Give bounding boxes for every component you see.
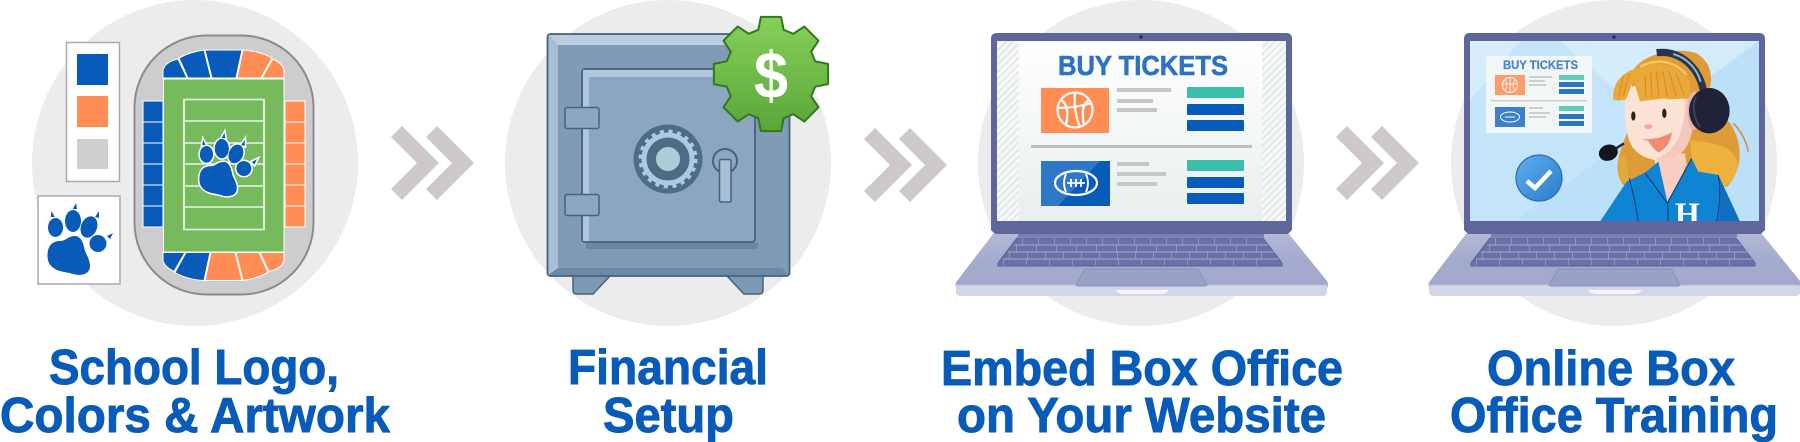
neck bbox=[1653, 153, 1687, 203]
headset band bbox=[1657, 52, 1703, 90]
safe door bbox=[586, 243, 758, 249]
eyes bbox=[1631, 111, 1635, 121]
laptop screen with ticket page bbox=[997, 41, 1286, 221]
panel: school logo, colors and artwork bbox=[32, 0, 358, 326]
mini ticket page: BUY TICKETS bbox=[1503, 58, 1578, 72]
text lines row two bbox=[1117, 162, 1166, 186]
face bbox=[1625, 82, 1693, 160]
football field bbox=[164, 79, 284, 252]
label: embed box office on your website: on Your Website bbox=[957, 389, 1326, 442]
label: school logo colors and artwork: School Logo, bbox=[49, 341, 339, 395]
logo card with paw bbox=[38, 196, 120, 284]
background circle 2 bbox=[505, 0, 831, 326]
buttons row one bbox=[1187, 87, 1244, 131]
label: financial setup: Setup bbox=[603, 389, 734, 442]
ear cushion and cup bbox=[1688, 91, 1697, 130]
green gear with dollar sign: $ bbox=[754, 38, 788, 112]
door hinges bbox=[565, 108, 599, 216]
panel: embed box office on website bbox=[956, 0, 1328, 326]
safe illustration bbox=[548, 34, 790, 294]
nose bbox=[1644, 124, 1652, 129]
jacket bbox=[1600, 158, 1740, 222]
safe feet bbox=[573, 276, 763, 294]
background circle 3 bbox=[978, 0, 1304, 326]
text lines row one bbox=[1117, 88, 1171, 112]
panel: online box office training bbox=[1428, 0, 1800, 326]
stadium illustration bbox=[134, 36, 314, 294]
label: online box office training: Online Box bbox=[1487, 342, 1735, 396]
right stands bbox=[285, 101, 305, 227]
arrow 3 bbox=[1336, 126, 1419, 200]
color swatch card bbox=[66, 42, 120, 182]
laptop frame bbox=[1428, 33, 1800, 296]
football event row bbox=[1041, 161, 1110, 206]
top stands bbox=[163, 50, 284, 78]
back hair bbox=[1618, 51, 1740, 187]
mini ticket page bbox=[1486, 56, 1592, 133]
microphone bbox=[1616, 142, 1625, 149]
laptop screen with trainer bbox=[1470, 41, 1759, 231]
heading: buy tickets: BUY TICKETS bbox=[1058, 50, 1228, 81]
arrow 1 bbox=[391, 126, 474, 200]
fringe hair bbox=[1613, 64, 1690, 101]
mouth bbox=[1642, 132, 1672, 153]
panel: financial setup bbox=[505, 0, 831, 326]
field paw logo bbox=[199, 133, 257, 196]
laptop frame bbox=[956, 33, 1328, 296]
label: school logo colors and artwork: Colors & Artwork bbox=[0, 389, 391, 442]
buttons row two bbox=[1187, 160, 1244, 204]
background circle 4 bbox=[1451, 0, 1777, 326]
safe handle bbox=[713, 149, 737, 202]
background circle 1 bbox=[32, 0, 358, 326]
label: financial setup: Financial bbox=[568, 341, 768, 395]
green gear with dollar sign bbox=[714, 17, 828, 131]
safe body bbox=[548, 34, 790, 276]
basketball event row bbox=[1041, 88, 1109, 133]
trainer character with headset: H bbox=[1675, 195, 1700, 231]
label: embed box office on your website: Embed Box Office bbox=[941, 342, 1343, 396]
check mark badge bbox=[1516, 155, 1562, 201]
bottom stands bbox=[163, 252, 284, 280]
left stands bbox=[143, 101, 163, 227]
label: online box office training: Office Training bbox=[1450, 389, 1778, 442]
trainer character with headset bbox=[1597, 51, 1748, 231]
combination dial bbox=[634, 124, 702, 194]
arrow 2 bbox=[864, 128, 947, 202]
